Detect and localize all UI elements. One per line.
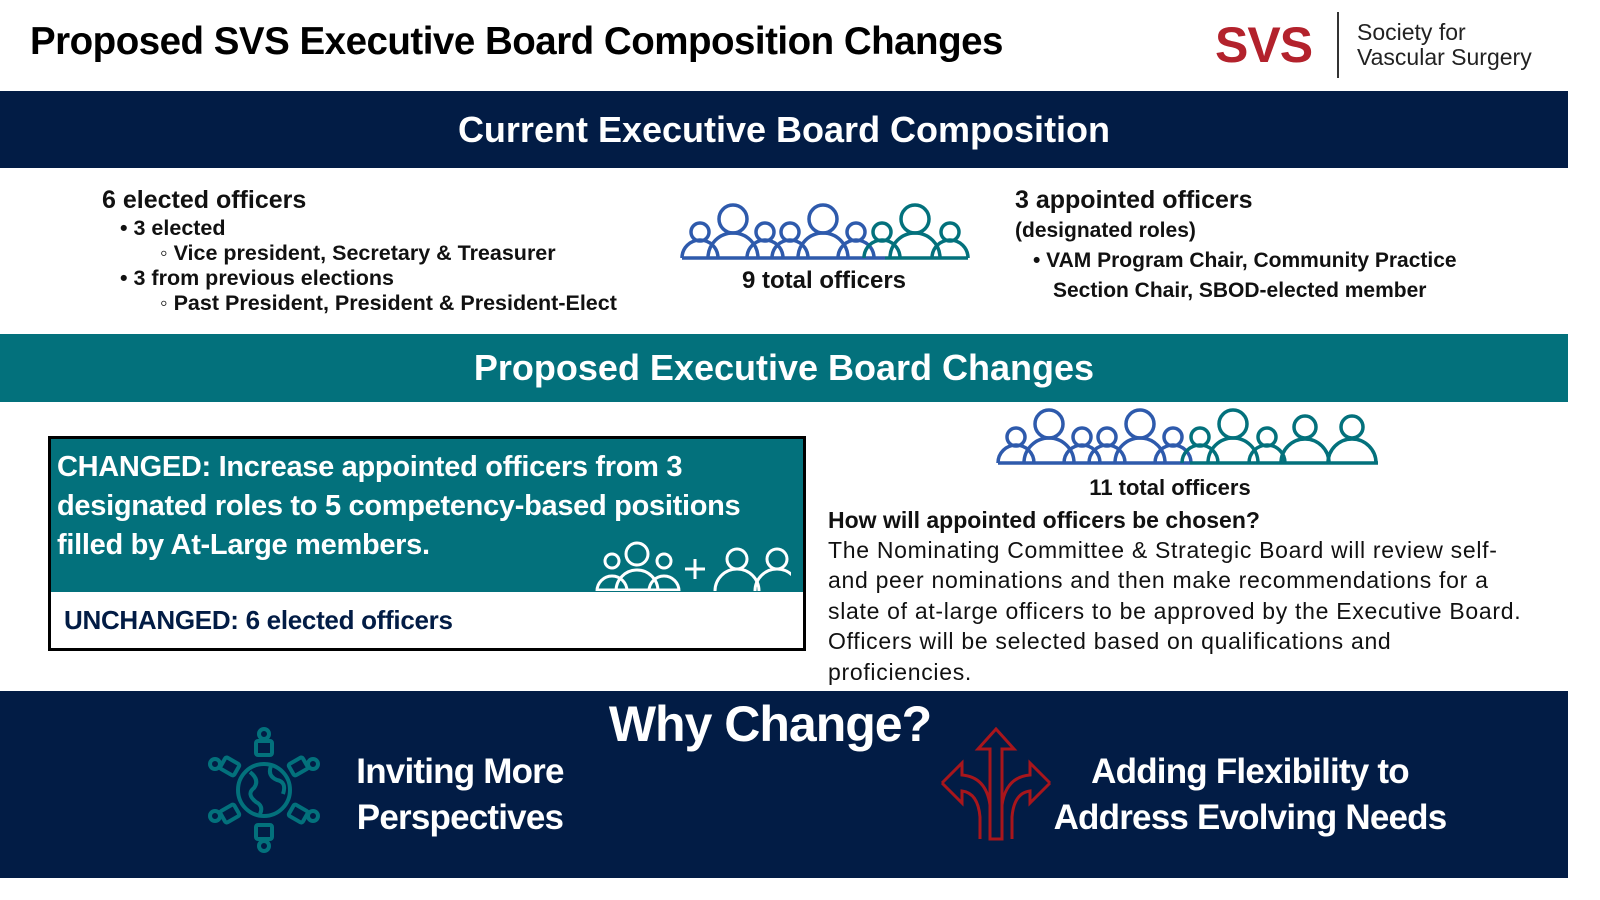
block: elected officers [102, 186, 617, 315]
logo [1215, 12, 1532, 78]
block: elected officers: • 3 from previous elections [120, 266, 394, 290]
icon: 9 officers [680, 203, 970, 260]
text: how chosen: The Nominating Committee & Strategic Board will review self- [828, 537, 1498, 563]
block: elected officers: • 3 elected [120, 216, 226, 240]
logo: SVS [1215, 17, 1312, 73]
unchanged text: UNCHANGED: 6 elected officers [64, 605, 453, 635]
text: how chosen [828, 507, 1521, 685]
changed text: CHANGED: Increase appointed officers from 3 [57, 451, 682, 483]
block: appointed officers: Section Chair, SBOD-elected member [1053, 279, 1426, 302]
text: how chosen: and peer nominations and then make recommendations for a [828, 567, 1489, 593]
label: 9 total officers: 9 total officers [742, 267, 906, 294]
text: how chosen: slate of at-large officers to be approved by the Executive Board. [828, 598, 1521, 624]
title: Proposed SVS Executive Board Composition Changes [30, 20, 1003, 63]
icon: 3 plus 2 people [596, 542, 791, 591]
block: elected officers: ◦ Vice president, Secretary & Treasurer [160, 241, 556, 265]
block: elected officers: ◦ Past President, President & President-Elect [160, 291, 617, 315]
block: elected officers: 6 elected officers [102, 186, 306, 214]
heading: why change: Why Change? [609, 696, 931, 752]
block: appointed officers: • VAM Program Chair, Community Practice [1033, 249, 1457, 272]
band: proposed [0, 334, 1568, 402]
block: appointed officers: (designated roles) [1015, 219, 1196, 242]
changed text [51, 439, 803, 592]
icon: 11 officers [996, 408, 1378, 465]
logo: Vascular Surgery [1357, 44, 1532, 70]
label: 11 total officers: 11 total officers [1089, 475, 1251, 500]
text: how chosen: proficiencies. [828, 659, 972, 685]
block: appointed officers [1015, 186, 1457, 302]
text: how chosen: Officers will be selected based on qualifications and [828, 628, 1391, 654]
band: current [0, 91, 1568, 168]
text: adding flexibility: Adding Flexibility to Address Evolving Needs [1054, 752, 1446, 837]
icon: diverging arrows [941, 727, 1051, 840]
panel: changed/unchanged box [48, 436, 806, 651]
text: how chosen: How will appointed officers be chosen? [828, 507, 1260, 533]
changed text: filled by At-Large members. [57, 529, 430, 561]
logo: Society for [1357, 19, 1466, 45]
band: proposed: Proposed Executive Board Changes [474, 347, 1094, 388]
block: appointed officers: 3 appointed officers [1015, 186, 1253, 214]
changed text: designated roles to 5 competency-based positions [57, 490, 740, 522]
band: current: Current Executive Board Composition [458, 109, 1110, 150]
icon: globe with people [208, 727, 320, 853]
text: inviting more perspectives: Inviting More Perspectives [356, 752, 564, 837]
panel: why change [0, 691, 1568, 878]
